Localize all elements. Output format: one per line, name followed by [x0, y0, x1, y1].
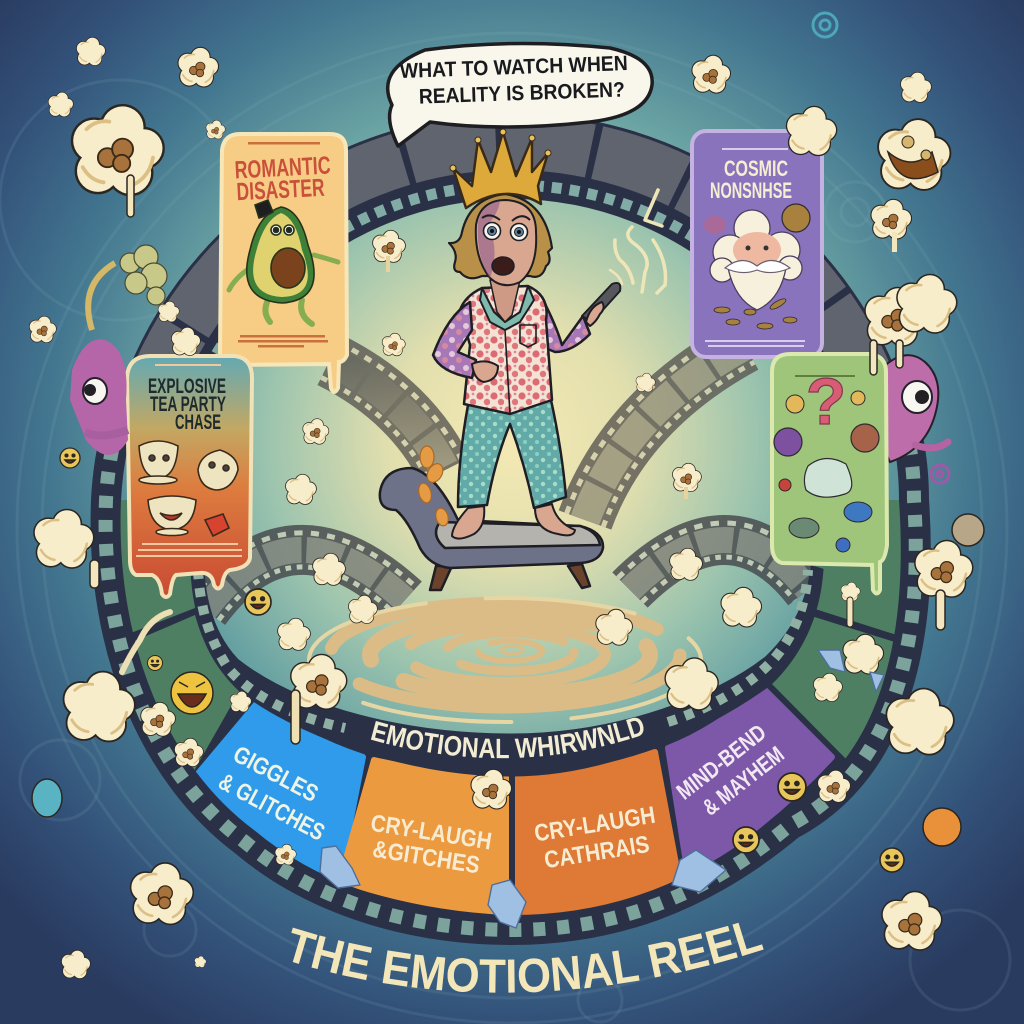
poster: romantic disaster	[220, 134, 347, 392]
label: cry-laugh: CRY-LAUGH	[369, 810, 494, 855]
fine print	[705, 148, 805, 347]
popcorn cluster: lower area	[62, 541, 972, 978]
tea cups	[139, 441, 238, 536]
crown	[450, 129, 551, 208]
tail popcorn greenish	[120, 245, 167, 305]
laughing popcorn top right	[879, 120, 950, 189]
crumpled tissues	[320, 650, 884, 928]
bearded cloud	[710, 210, 802, 310]
pajama pants	[458, 400, 566, 508]
top film strip	[133, 122, 892, 363]
poster: cosmic nonsense	[692, 131, 822, 357]
small smiles	[60, 448, 904, 872]
poster title line 1: ROMANTIC	[234, 152, 331, 185]
green segment upper right	[812, 500, 908, 636]
teal spiral	[813, 13, 837, 37]
poster title line 2: NONSNHSE	[710, 178, 792, 203]
orange splashes	[417, 446, 450, 527]
blue blob	[32, 779, 62, 817]
segment: mind-bend and mayhem	[668, 688, 832, 875]
label: mind-bend: MIND-BEND	[671, 719, 771, 805]
film strip lower right	[630, 540, 808, 590]
pink monster left	[70, 263, 128, 455]
pajama shirt	[460, 286, 552, 414]
brown blob	[851, 424, 879, 452]
poster title line 3: CHASE	[175, 411, 221, 434]
eyes	[482, 215, 530, 240]
character on chaise	[380, 129, 620, 590]
pink creature	[704, 216, 726, 234]
bubble line 1: WHAT TO WATCH WHEN	[399, 52, 628, 83]
neck	[490, 280, 520, 322]
label: giggles: GIGGLES	[229, 741, 322, 808]
gray emoji	[952, 514, 984, 546]
poster: question mark chaos	[772, 354, 887, 594]
film strip lower left	[205, 550, 405, 610]
film strip upper right	[585, 345, 745, 520]
inner film band	[192, 567, 822, 775]
poster: explosive tea party chase	[127, 356, 252, 597]
inner fading film strips	[205, 345, 808, 610]
label: gitches: &GITCHES	[371, 836, 482, 879]
yellow blobs	[786, 391, 865, 413]
whirlpool swirl	[309, 598, 701, 722]
label: and mayhem: & MAYHEM	[697, 741, 789, 820]
popcorn cluster: upper area	[49, 38, 931, 355]
teapot creature	[804, 458, 852, 497]
antenna stalk	[88, 263, 115, 330]
left arm	[433, 302, 476, 378]
pink monster right	[880, 355, 948, 462]
left hand	[472, 361, 498, 382]
signal waves	[610, 190, 666, 293]
label: cathrais: CATHRAIS	[542, 831, 651, 874]
right arm with remote	[538, 283, 620, 352]
label: cry-laugh: CRY-LAUGH	[532, 802, 657, 847]
film strip upper left	[330, 360, 445, 470]
speech bubble	[388, 43, 652, 146]
popcorn cluster: middle area	[30, 231, 860, 650]
avocado character	[229, 200, 338, 324]
bare feet	[452, 504, 575, 539]
mouth	[492, 257, 514, 275]
outer film ring with sprockets	[106, 425, 916, 930]
small creatures	[779, 479, 872, 552]
purple blob	[774, 428, 802, 456]
green segment lower right	[770, 615, 898, 765]
orange emoji	[923, 808, 961, 846]
green segment lower left	[118, 615, 240, 778]
shirt placket and pocket	[505, 325, 536, 414]
segment: cry-laugh and gitches	[340, 760, 506, 912]
fine print	[238, 142, 328, 348]
floating rock	[782, 204, 810, 232]
poster title line 2: TEA PARTY	[150, 393, 226, 416]
hair	[449, 194, 552, 278]
face	[476, 200, 536, 285]
segment: giggles and glitches	[190, 702, 363, 885]
chaise lounge	[380, 446, 603, 590]
fine print	[136, 364, 242, 557]
collar	[480, 286, 534, 330]
question mark: ?	[806, 364, 846, 438]
green segment upper left	[113, 500, 195, 638]
crumbs	[714, 297, 797, 329]
main title: THE EMOTIONAL REEL	[291, 922, 764, 993]
bottom reel base	[106, 500, 916, 930]
purple spiral	[931, 465, 949, 483]
segment: cry-laugh cathrais	[518, 752, 680, 915]
fine print	[795, 375, 855, 377]
poster title line 1: COSMIC	[724, 156, 788, 181]
band title: EMOTIONAL WHIRWNLD	[370, 718, 644, 758]
bruised skin	[478, 201, 500, 278]
laughing emoji	[171, 672, 213, 714]
large dripping popcorn right	[866, 275, 956, 375]
poster title line 1: EXPLOSIVE	[148, 375, 226, 398]
poster title line 2: DISASTER	[236, 174, 325, 206]
emoji faces	[32, 13, 984, 872]
label: and glitches: & GLITCHES	[214, 768, 329, 847]
bubble line 2: REALITY IS BROKEN?	[418, 78, 625, 109]
